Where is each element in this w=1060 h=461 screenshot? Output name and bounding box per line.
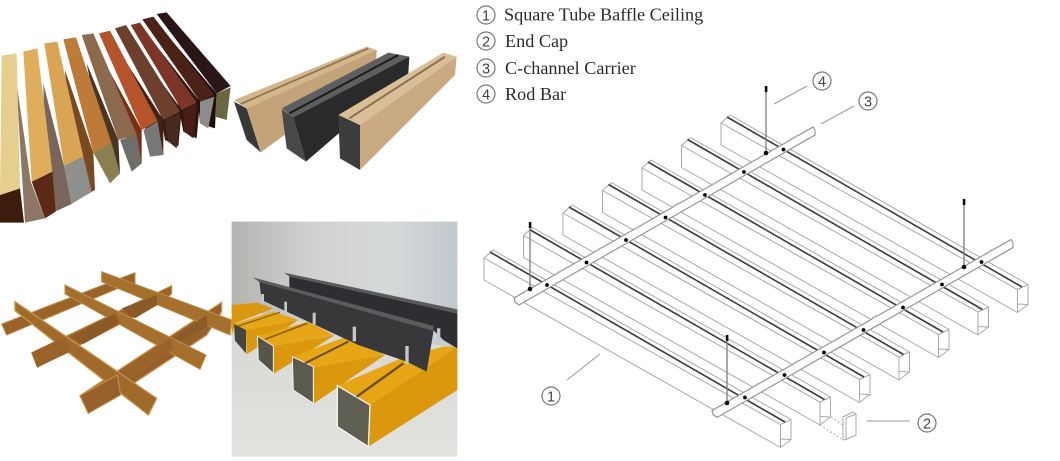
legend xyxy=(477,4,703,104)
photo: tan and grey slotted baffles xyxy=(234,47,457,170)
callout 3 xyxy=(821,92,877,124)
baffle row xyxy=(484,115,1028,448)
callout 2 xyxy=(867,414,936,432)
legend item 4: Rod Bar xyxy=(505,84,566,104)
carrier: left C-channel xyxy=(514,127,815,305)
legend item 1: Square Tube Baffle Ceiling xyxy=(504,4,703,24)
photo: wood-finish lattice grid xyxy=(2,272,232,415)
legend item 2: 2 xyxy=(482,34,490,50)
photo: wood-grain baffle colour range xyxy=(0,12,231,223)
rod bar: front left xyxy=(528,222,532,291)
rod bar: front right xyxy=(725,335,729,405)
photo: yellow baffles with black carrier rails xyxy=(232,222,457,457)
legend item 2 xyxy=(477,31,568,51)
legend item 1: 1 xyxy=(482,8,490,24)
legend item 4 xyxy=(477,84,566,104)
callout 4: 4 xyxy=(818,74,826,90)
legend item 4: 4 xyxy=(482,88,490,104)
legend item 3: 3 xyxy=(482,62,490,78)
legend item 3: C-channel Carrier xyxy=(505,58,636,78)
callout 2: 2 xyxy=(923,416,931,432)
legend item 2: End Cap xyxy=(505,31,568,51)
technical diagram: baffle ceiling assembly xyxy=(484,72,1028,448)
callout 3: 3 xyxy=(864,94,872,110)
rod bar: back right xyxy=(962,199,966,269)
callout 1 xyxy=(542,354,600,406)
callout 1: 1 xyxy=(547,390,555,406)
rod bar: back left xyxy=(764,86,768,155)
carrier: right C-channel xyxy=(712,240,1013,418)
callout 4 xyxy=(774,72,831,104)
end cap with dashed guide lines xyxy=(820,412,856,440)
